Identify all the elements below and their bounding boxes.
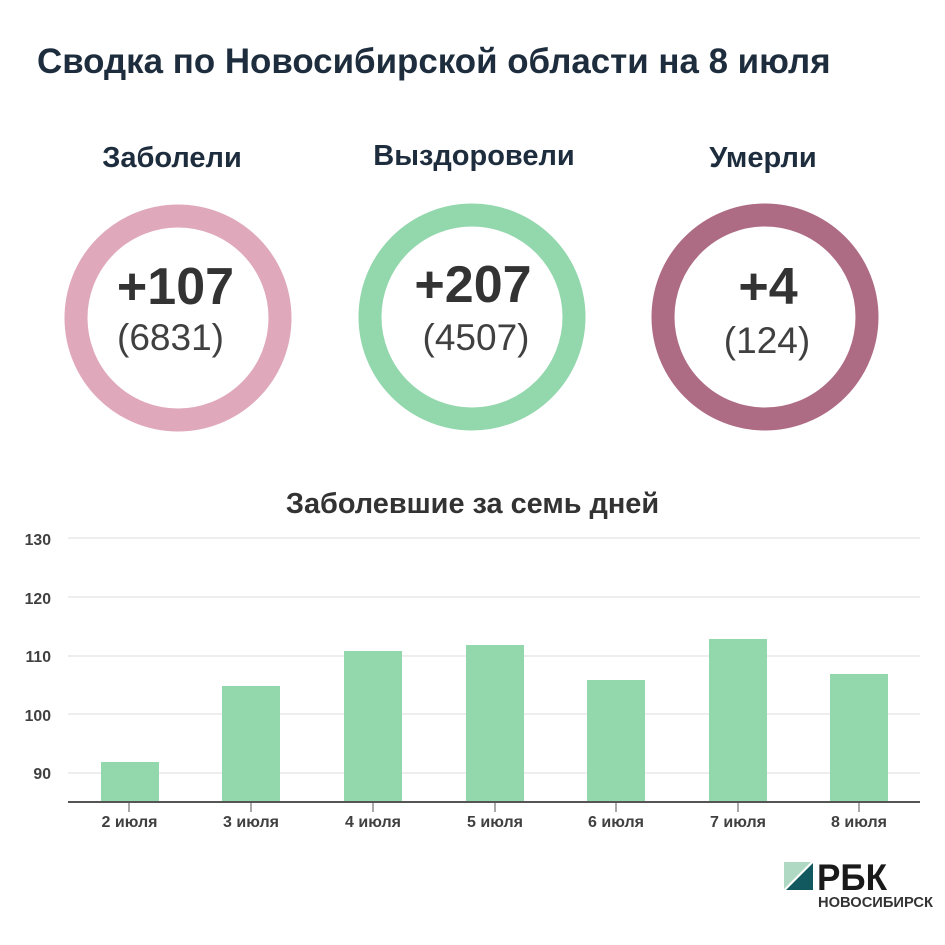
y axis labels: 100	[25, 708, 51, 725]
ring: infected	[76, 216, 280, 420]
bars	[101, 639, 888, 801]
x axis	[68, 802, 920, 812]
ring: recovered	[370, 215, 574, 419]
y axis labels: 90	[33, 766, 51, 783]
value: infected today: +107	[117, 258, 234, 316]
value: infected total: (6831)	[117, 317, 224, 358]
y axis labels: 120	[25, 591, 51, 608]
chart heading: Заболевшие за семь дней	[286, 488, 659, 520]
x axis labels: 2 июля	[102, 814, 157, 831]
heading: recovered: Выздоровели	[373, 140, 575, 172]
value: recovered today: +207	[414, 256, 532, 314]
y axis labels: 130	[25, 532, 51, 549]
logo mark	[784, 862, 813, 890]
x axis labels: 7 июля	[710, 814, 766, 831]
title: Сводка по Новосибирской области на 8 июля	[37, 42, 831, 81]
heading: deaths: Умерли	[709, 142, 817, 174]
value: recovered total: (4507)	[423, 317, 529, 358]
x axis labels: 4 июля	[345, 814, 401, 831]
heading: infected: Заболели	[102, 142, 242, 174]
panel: infected	[76, 142, 280, 420]
bar chart	[25, 532, 920, 831]
y axis labels	[25, 532, 51, 783]
ring: deaths	[663, 215, 867, 419]
x axis labels	[102, 814, 887, 831]
x axis labels: 6 июля	[588, 814, 644, 831]
x axis labels: 5 июля	[467, 814, 523, 831]
value: deaths today: +4	[738, 258, 798, 316]
x axis labels: 8 июля	[831, 814, 887, 831]
panel: recovered	[370, 140, 575, 419]
y axis labels: 110	[26, 649, 51, 666]
x axis labels: 3 июля	[223, 814, 279, 831]
logo: RBC Novosibirsk	[784, 857, 933, 911]
logo city: НОВОСИБИРСК	[818, 895, 933, 911]
panel: deaths	[663, 142, 867, 419]
value: deaths total: (124)	[724, 320, 810, 361]
logo wordmark: РБК	[817, 857, 887, 898]
